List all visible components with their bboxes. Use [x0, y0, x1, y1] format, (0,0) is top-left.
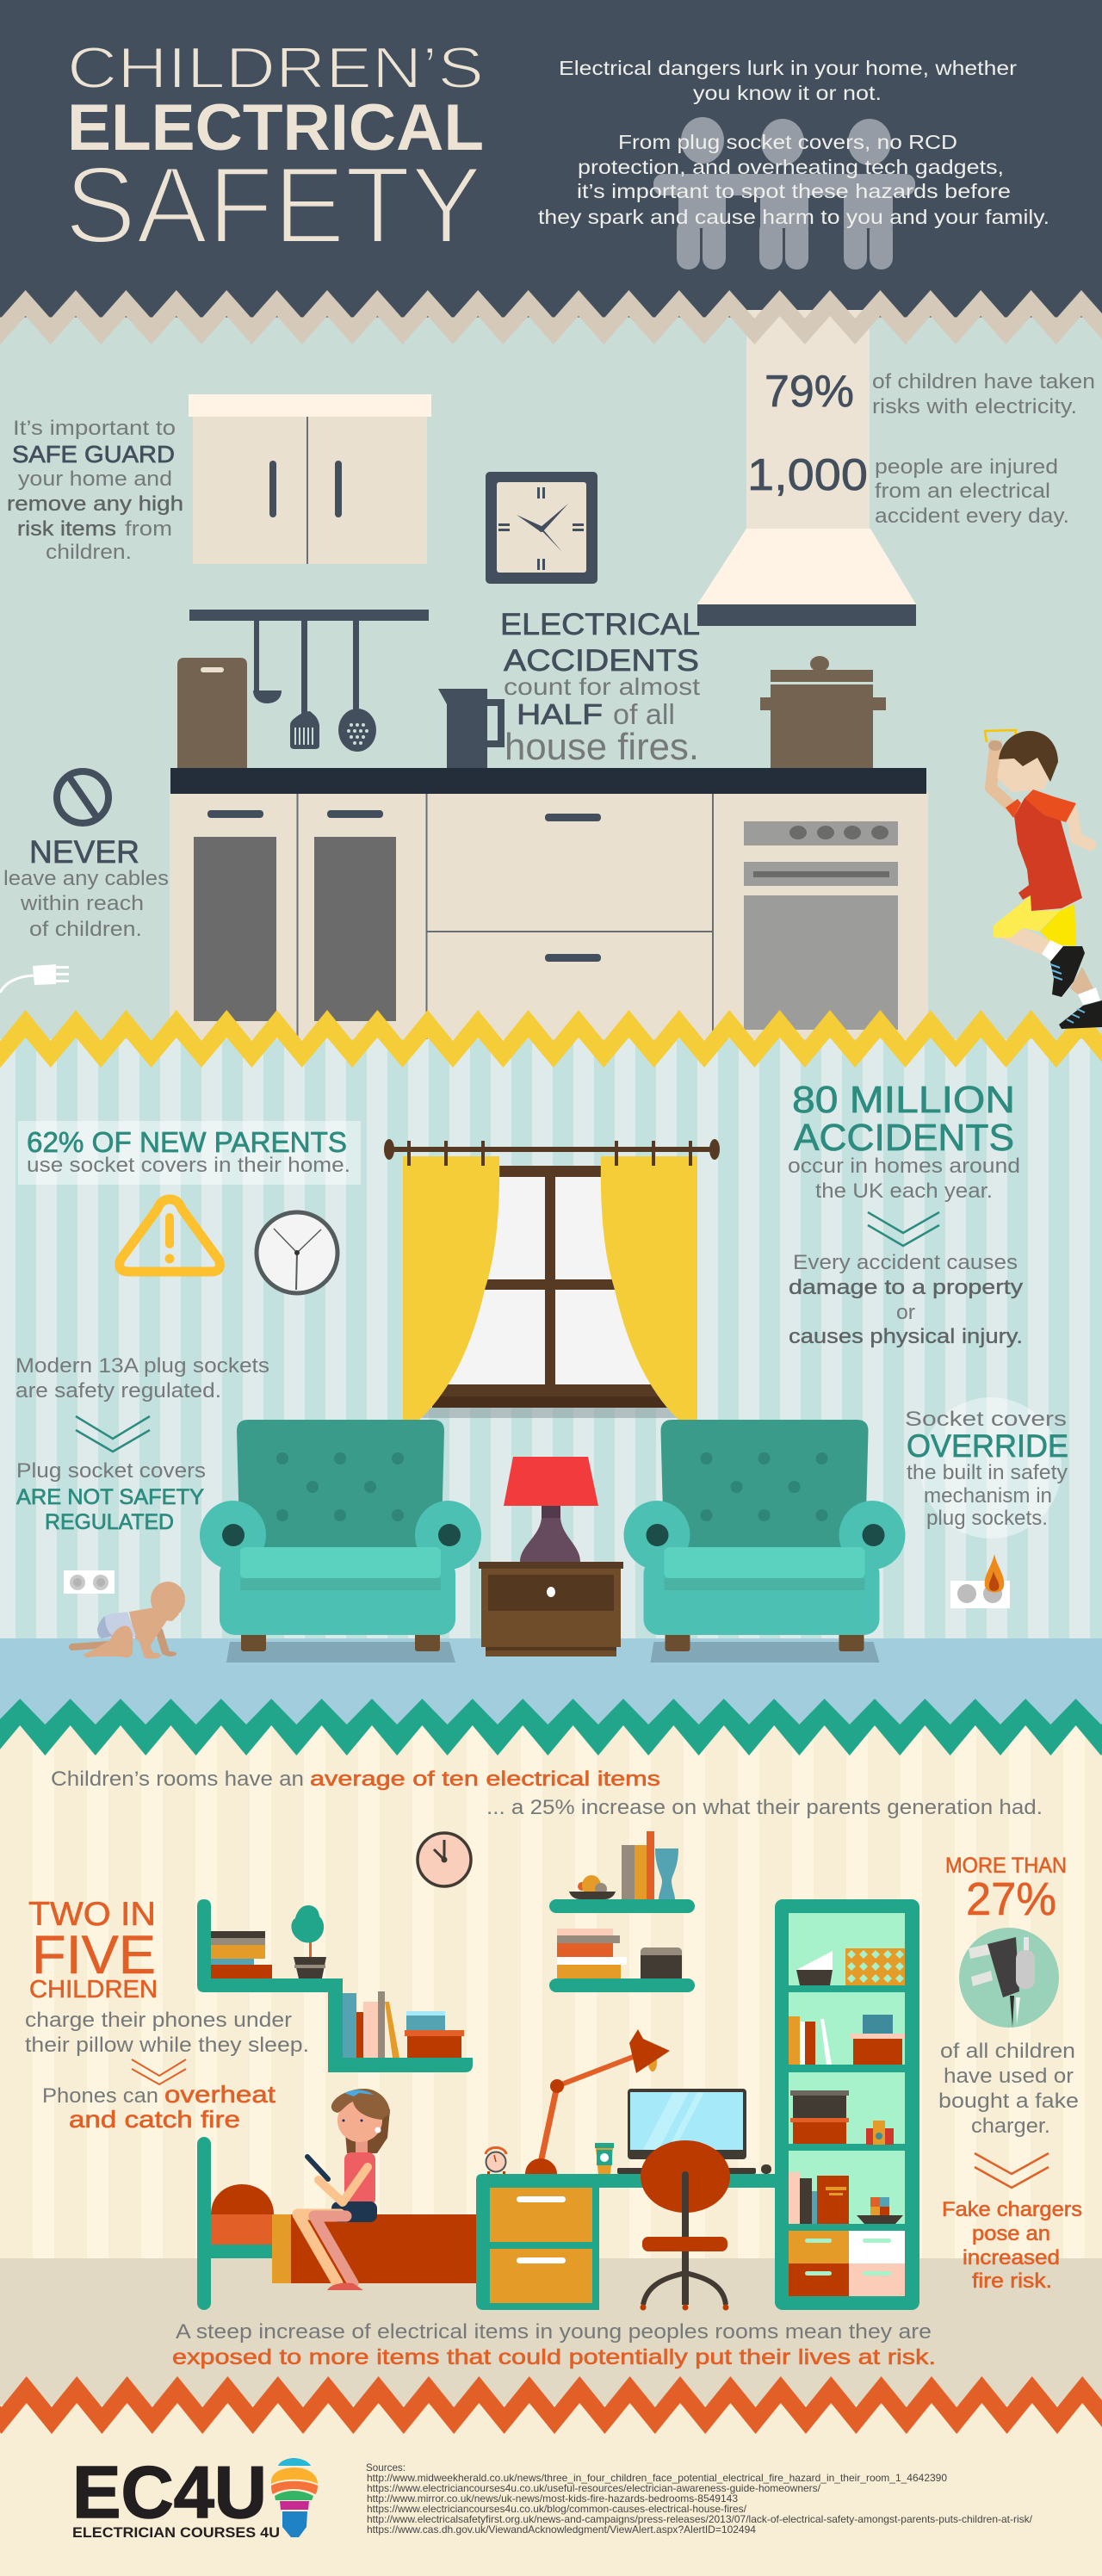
text: electrical accidents: of all [613, 698, 675, 730]
desk lamp [525, 2029, 670, 2174]
background: living room floor [0, 1638, 1102, 1726]
text: safe guard: remove any high [7, 492, 183, 516]
text: never: NEVER [29, 834, 139, 870]
text: more than 27%: 27% [966, 1873, 1056, 1925]
icon: alarm clock [486, 2147, 506, 2174]
wall cupboard [189, 394, 431, 564]
title: SAFETY [65, 144, 482, 266]
text: fake chargers: increased [963, 2246, 1060, 2269]
text: two in five children: TWO IN [28, 1896, 156, 1933]
text: safe guard [7, 417, 183, 564]
cooker [744, 821, 898, 1030]
text: phones can overheat: overheat [164, 2081, 276, 2108]
kitchen units [170, 768, 928, 1039]
logo: EC4U: EC4U [72, 2452, 267, 2534]
icon: prohibition sign [57, 771, 108, 823]
text: 80 million accidents: ACCIDENTS [794, 1117, 1014, 1159]
text: safe guard: from [125, 517, 172, 541]
title [65, 35, 484, 266]
text: socket covers override: mechanism in [924, 1484, 1052, 1508]
text: never: of children. [29, 918, 142, 941]
intro text [538, 57, 1049, 228]
icon: plug and cable [0, 964, 69, 993]
orange zigzag border [0, 2376, 1102, 2434]
intro text: Electrical dangers lurk in your home, whether [559, 57, 1017, 79]
text: electrical accidents: HALF [517, 698, 603, 730]
background: bedroom wallpaper [0, 1725, 1102, 2259]
text: phones can overheat [42, 2081, 276, 2133]
intro text: From plug socket covers, no RCD [618, 131, 957, 153]
bed [197, 2137, 476, 2310]
icon: warning triangle [120, 1199, 220, 1272]
icon: round wall clock [257, 1212, 337, 1293]
bookcase [775, 1899, 919, 2310]
wall shelf left [197, 1899, 473, 2072]
background: living room wallpaper [0, 1039, 1102, 1642]
background: bedroom floor [0, 2258, 1102, 2406]
header panel [0, 0, 1102, 317]
desk [476, 2174, 775, 2310]
text: electrical accidents: ACCIDENTS [504, 644, 699, 678]
intro text: it’s important to spot these hazards before [577, 180, 1011, 202]
text: safe guard: risk items [17, 517, 116, 541]
text: 80 million accidents [788, 1079, 1020, 1203]
right armchair [623, 1420, 906, 1663]
text: safe guard: SAFE GUARD [12, 441, 175, 468]
stat: 1,000: accident every day. [875, 505, 1069, 528]
wall shelf lower right [549, 1929, 695, 1992]
text: electrical accidents: count for almost [504, 673, 700, 700]
sources list: http://www.mirror.co.uk/news/uk-news/most-kids-fire-hazards-bedrooms-8549143 [367, 2492, 738, 2505]
icon: three children silhouettes [653, 117, 915, 269]
text: plug socket covers: REGULATED [45, 1510, 174, 1534]
intro text: protection, and overheating tech gadgets, [578, 156, 1004, 178]
text: electrical accidents: ELECTRICAL [500, 608, 700, 641]
sources list: http://www.midweekherald.co.uk/news/three_in_four_children_face_potential_electrical_fire_hazard_in_their_room_1_4642390 [367, 2472, 947, 2484]
stat: 1,000: 1,000 [747, 450, 868, 500]
stat: 79%: of children have taken [872, 370, 1095, 393]
text: more than 27%: MORE THAN [945, 1854, 1067, 1878]
title: ELECTRICAL [67, 91, 484, 164]
text: fake chargers: Fake chargers [942, 2198, 1082, 2221]
left armchair [200, 1420, 481, 1663]
stat: 1,000: from an electrical [875, 480, 1050, 503]
stat: 1,000: people are injured [875, 455, 1058, 479]
callout: 62% of new parents: use socket covers in their home. [27, 1154, 350, 1177]
window with curtains [384, 1139, 720, 1420]
text: phones can overheat: and catch fire [69, 2106, 240, 2133]
text: 80 million accidents: the UK each year. [815, 1180, 993, 1203]
text: average of ten electrical items [51, 1768, 1043, 1819]
text: two in five children: FIVE [32, 1925, 156, 1985]
chevron arrow [868, 1212, 939, 1246]
text: of all children: charger. [971, 2115, 1050, 2138]
logo: EC4U: ELECTRICIAN COURSES 4U [72, 2524, 280, 2541]
text: every accident causes: or [896, 1301, 915, 1324]
yellow zigzag border [0, 1010, 1102, 1068]
chevron arrow [76, 1416, 150, 1452]
table lamp [504, 1457, 598, 1562]
text: of all children: of all children [940, 2040, 1075, 2063]
bedside table [479, 1562, 623, 1656]
text: socket covers override [905, 1397, 1068, 1539]
text: modern 13A plug sockets: Modern 13A plug sockets [15, 1354, 269, 1378]
tan zigzag border [0, 290, 1102, 344]
sources list [366, 2461, 1033, 2536]
sources list: https://www.electriciancourses4u.co.uk/useful-resources/electrician-awareness-guide-homeowners/ [367, 2482, 821, 2494]
text: two in five children: their pillow while they sleep. [25, 2034, 309, 2057]
text: steep increase [172, 2320, 936, 2369]
text: never: leave any cables [3, 867, 169, 890]
text: every accident causes [789, 1251, 1023, 1348]
text: socket covers override: Socket covers [905, 1408, 1067, 1431]
text: safe guard: It’s important to [13, 417, 176, 440]
text: electrical accidents [500, 608, 700, 768]
text: safe guard: your home and [18, 468, 172, 491]
text: electrical accidents: house fires. [505, 726, 699, 768]
girl with phone [298, 2089, 390, 2290]
text: 80 million accidents: 80 MILLION [792, 1079, 1015, 1121]
pot [760, 656, 886, 769]
sources list: https://www.cas.dh.gov.uk/ViewandAcknowledgment/ViewAlert.aspx?AlertID=102494 [367, 2523, 756, 2536]
desk chair [641, 2140, 730, 2311]
icon: light bulb [271, 2458, 318, 2537]
sources list: http://www.electricalsafetyfirst.org.uk/news-and-campaigns/press-releases/2013/07/lack-of-electrical-safety-amongst-parents-puts-children-at-risk/ [367, 2513, 1033, 2525]
text: of all children [938, 2040, 1079, 2138]
wall shelf upper right [549, 1831, 695, 1913]
teal zigzag border [0, 1699, 1102, 1756]
text: socket covers override: the built in safety [907, 1461, 1068, 1484]
text: modern 13A plug sockets [15, 1354, 269, 1403]
background: kitchen wall [0, 317, 1102, 1040]
text: two in five children: charge their phones under [25, 2009, 292, 2032]
text: safe guard: children. [46, 541, 132, 564]
text: modern 13A plug sockets: are safety regulated. [15, 1379, 221, 1403]
text: more than 27% [945, 1854, 1067, 1925]
text: average of ten electrical items: average of ten electrical items [310, 1768, 660, 1791]
callout: 62% of new parents: 62% OF NEW PARENTS [27, 1126, 347, 1158]
icon: baby crawling [72, 1582, 185, 1658]
coffee cup [595, 2143, 614, 2174]
icon: fake charger [959, 1928, 1059, 2028]
text: steep increase: A steep increase of electrical items in young peoples rooms mean they are [176, 2320, 932, 2344]
text: of all children: bought a fake [938, 2090, 1079, 2113]
icon: wall socket [64, 1570, 115, 1594]
boy touching socket [985, 730, 1102, 1029]
text: never: within reach [20, 892, 144, 915]
text: never [3, 834, 169, 941]
icon: socket on fire [950, 1554, 1010, 1608]
text: fake chargers: fire risk. [972, 2269, 1052, 2293]
text: steep increase: exposed to more items that could potentially put their lives at risk. [172, 2345, 936, 2369]
chevron arrow [132, 2059, 186, 2084]
text: two in five children [25, 1896, 309, 2057]
text: phones can overheat: Phones can [42, 2084, 158, 2108]
text: plug socket covers [16, 1459, 206, 1534]
intro text: you know it or not. [693, 82, 882, 104]
stat: 79% [765, 367, 1095, 418]
stat: 79%: 79% [765, 367, 854, 417]
utensil rail [189, 610, 429, 752]
text: fake chargers [942, 2198, 1082, 2293]
callout: 62% of new parents [18, 1121, 361, 1185]
text: every accident causes: Every accident causes [793, 1251, 1018, 1274]
cutting board [177, 658, 247, 768]
intro text: they spark and cause harm to you and your family. [538, 206, 1049, 228]
text: plug socket covers: ARE NOT SAFETY [16, 1485, 204, 1509]
text: plug socket covers: Plug socket covers [16, 1459, 206, 1483]
stat: 1,000 [747, 450, 1069, 528]
jug [438, 689, 505, 768]
text: every accident causes: causes physical injury. [789, 1325, 1023, 1348]
sources list: Sources: [366, 2461, 406, 2474]
text: two in five children: CHILDREN [29, 1976, 158, 2003]
text: fake chargers: pose an [972, 2222, 1050, 2245]
sources list: https://www.electriciancourses4u.co.uk/blog/common-causes-electrical-house-fires/ [367, 2503, 747, 2515]
text: average of ten electrical items: ... a 25% increase on what their parents generation had. [486, 1796, 1043, 1819]
text: of all children: have used or [944, 2065, 1074, 2088]
background: footer [0, 2405, 1102, 2576]
title: CHILDREN’S [67, 35, 484, 101]
icon: bedroom wall clock [418, 1833, 471, 1886]
text: socket covers override: plug sockets. [926, 1507, 1048, 1530]
chevron arrow [975, 2153, 1049, 2188]
text: every accident causes: damage to a property [789, 1276, 1023, 1299]
text: socket covers override: OVERRIDE [907, 1428, 1068, 1464]
stat: 79%: risks with electricity. [872, 395, 1077, 418]
computer monitor and keyboard [617, 2089, 771, 2174]
text: 80 million accidents: occur in homes around [788, 1155, 1020, 1178]
cooker hood [697, 310, 916, 626]
icon: square wall clock [486, 472, 597, 584]
text: average of ten electrical items: Children’s rooms have an [51, 1768, 304, 1791]
